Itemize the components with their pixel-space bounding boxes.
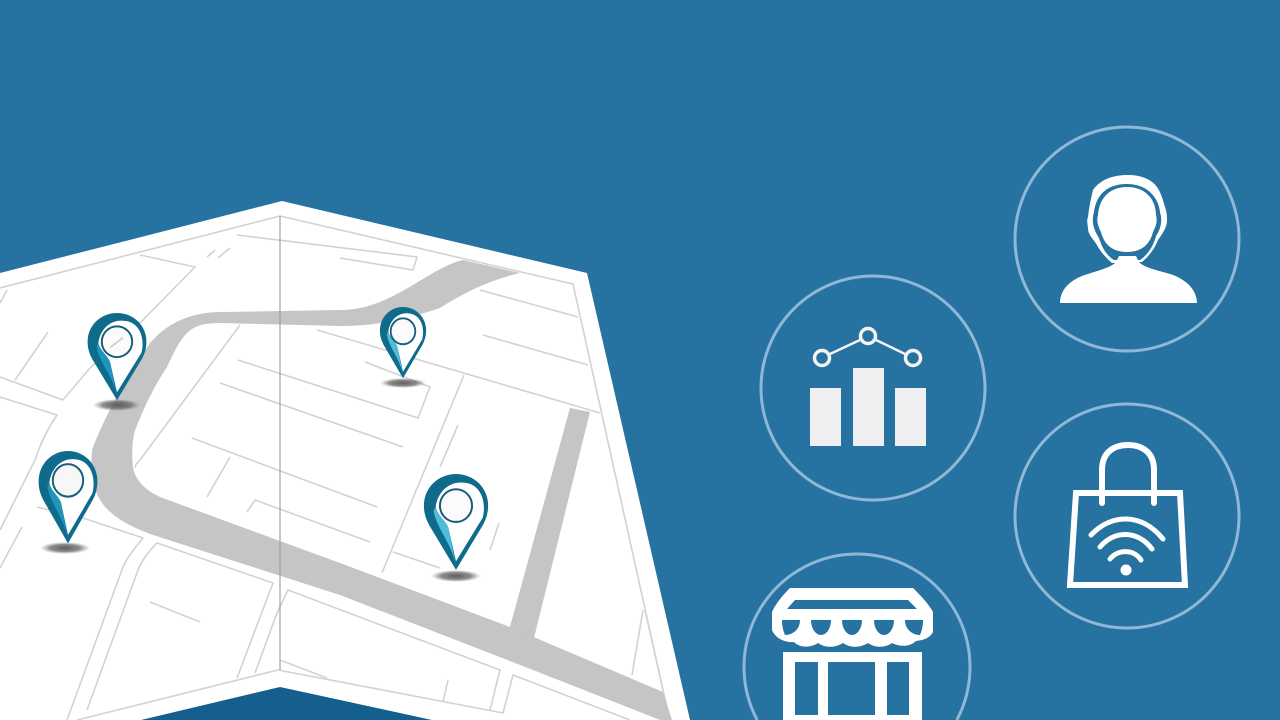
icon: map pin 1: [88, 313, 146, 411]
map roads: [92, 260, 672, 720]
person face gap: [1093, 184, 1161, 260]
icon: map pin 3: [380, 307, 426, 388]
awning scallops: [782, 620, 923, 635]
store body: [783, 652, 922, 720]
bottom notch: [141, 687, 432, 720]
awning opening: [787, 600, 917, 609]
bag handle: [1102, 445, 1154, 503]
icon: shopping bag with wifi in circle: [1015, 404, 1239, 628]
icon: person in circle: [1015, 127, 1239, 351]
wifi symbol: [1091, 519, 1163, 560]
chart trend line: [814, 328, 920, 366]
icon: storefront in circle: [744, 554, 970, 720]
icon: map pin 4: [424, 474, 488, 582]
wifi dot: [1120, 564, 1132, 576]
map fold line: [279, 216, 281, 670]
person hair outline: [1087, 175, 1167, 263]
panel: folded map: [0, 201, 690, 720]
store awning: [772, 588, 933, 647]
map sheet: [0, 201, 690, 720]
chart bars: [810, 368, 926, 446]
person head: [1097, 187, 1157, 252]
person shoulders: [1060, 256, 1197, 303]
bag body: [1070, 493, 1185, 585]
icon: map pin 2: [39, 451, 97, 554]
icon: bar chart in circle: [761, 276, 985, 500]
map street lines: [0, 216, 670, 720]
